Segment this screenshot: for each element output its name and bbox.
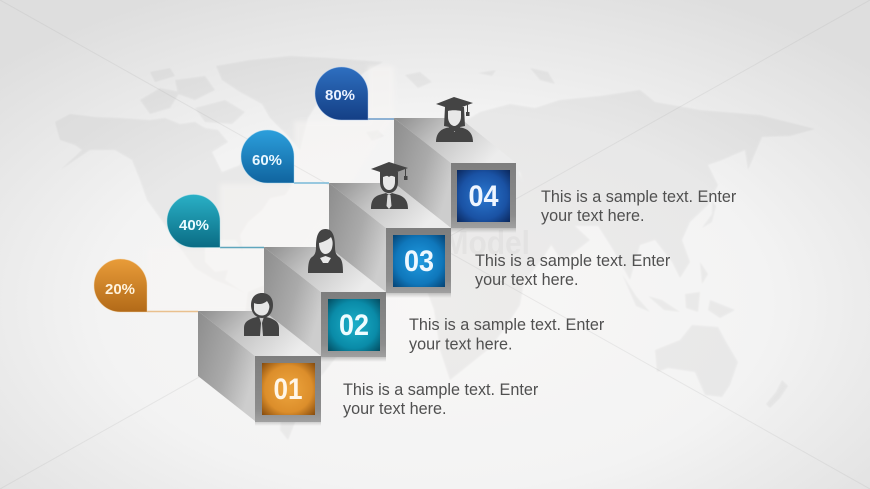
bubble 40%: 40% (179, 217, 209, 234)
bubble 60% (241, 130, 294, 183)
text block 2: This is a sample text. Enter (409, 316, 604, 334)
faint light band behind stairs (147, 66, 394, 312)
bubble 20% (94, 259, 147, 312)
bubble 60%: 60% (252, 152, 282, 169)
text block 4: your text here. (541, 207, 644, 225)
number 04: 04 (468, 180, 499, 213)
icon: man with headset (244, 293, 279, 336)
icon: graduate man (371, 162, 408, 209)
step 4 (394, 118, 516, 233)
text block 2: your text here. (409, 336, 512, 354)
bubble 80% (315, 67, 368, 120)
text block 1: your text here. (343, 400, 446, 418)
text block 3: This is a sample text. Enter (475, 252, 670, 270)
connector lines (147, 119, 394, 312)
step 3 (329, 183, 451, 298)
bubble 40% (167, 194, 220, 248)
text block 4: This is a sample text. Enter (541, 188, 736, 206)
step 1 (198, 311, 321, 426)
bubble 20%: 20% (105, 281, 135, 298)
world map (55, 56, 815, 440)
number 01: 01 (274, 373, 302, 406)
number 02: 02 (339, 309, 369, 342)
watermark: SlideModel (372, 224, 530, 261)
icon: graduate woman (436, 97, 473, 142)
step 2 (264, 247, 386, 362)
number 03: 03 (404, 245, 434, 278)
icon: woman with long hair (308, 229, 343, 273)
bubble 80%: 80% (325, 87, 355, 104)
text block 1: This is a sample text. Enter (343, 381, 538, 399)
text block 3: your text here. (475, 271, 578, 289)
